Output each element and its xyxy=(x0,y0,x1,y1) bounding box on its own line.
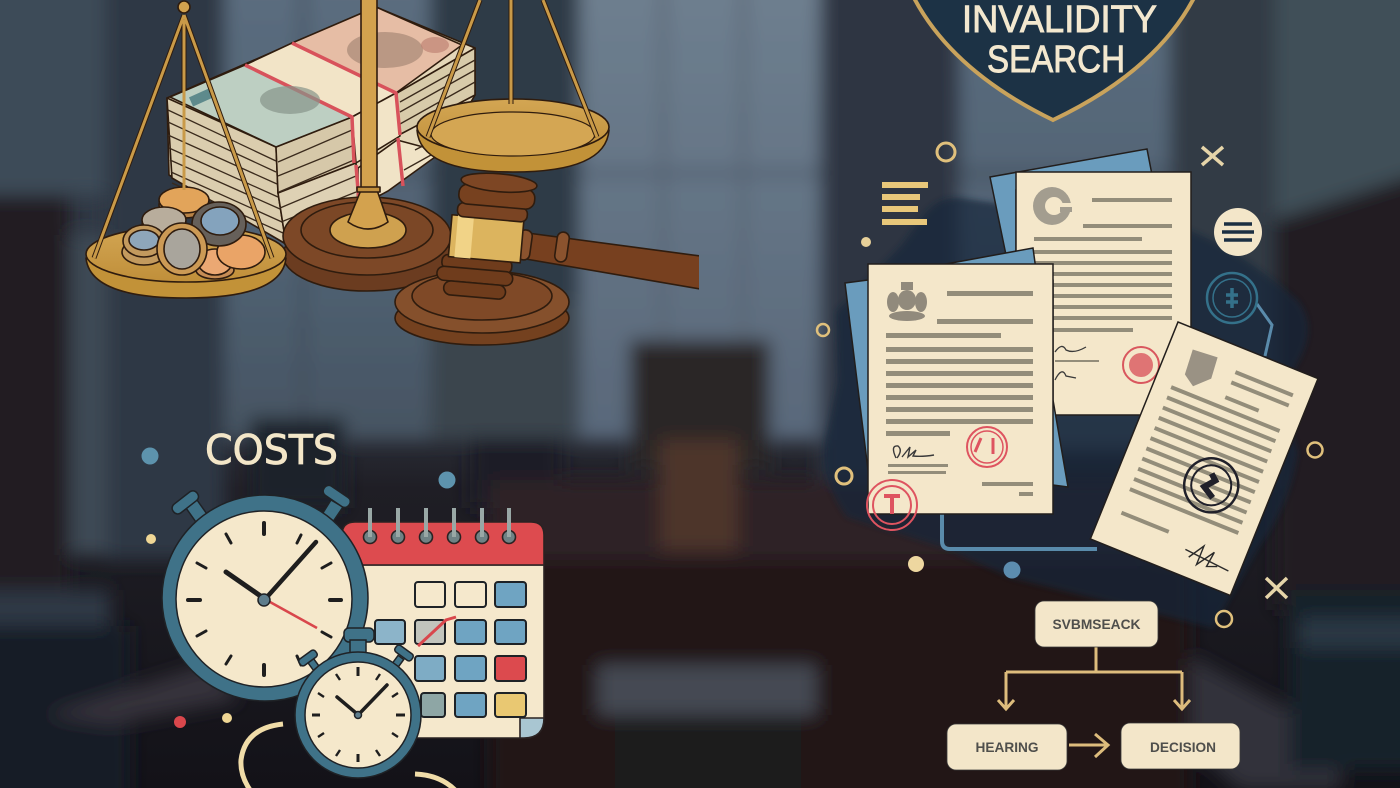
icon: large stopwatch xyxy=(162,483,368,701)
icon: calendar xyxy=(342,508,544,738)
decorative arcs xyxy=(241,724,455,788)
icon: left rear string xyxy=(182,20,186,190)
shield: invalidity search xyxy=(912,0,1196,120)
black stamp xyxy=(1176,450,1246,520)
calendar binder rings xyxy=(364,508,516,544)
connector lines xyxy=(942,304,1272,549)
page text lines xyxy=(1034,198,1172,362)
illustration: scales, money and gavel xyxy=(86,0,700,345)
calendar day cells xyxy=(375,582,526,717)
heading: costs: COSTS xyxy=(205,426,338,474)
crest xyxy=(887,282,927,321)
shield title line 1: INVALIDITY xyxy=(962,0,1157,41)
icon: gavel block xyxy=(395,271,569,345)
red stamp xyxy=(1123,347,1159,383)
icon: small stopwatch xyxy=(295,628,421,778)
document: top page xyxy=(990,149,1191,415)
flowchart xyxy=(947,601,1240,770)
logo xyxy=(1033,187,1072,225)
icon: right scale pan xyxy=(417,0,609,172)
icon: cream menu badge xyxy=(1214,208,1262,256)
document: front page xyxy=(845,248,1068,530)
page text lines xyxy=(886,291,1033,496)
icon: teal seal xyxy=(1207,273,1257,323)
shield title line 2: SEARCH xyxy=(987,39,1125,81)
flow box: submit search xyxy=(1035,601,1158,647)
icon: left scale pan with coins xyxy=(86,1,286,298)
red stamps xyxy=(867,427,1007,530)
flow box: hearing xyxy=(947,724,1067,770)
flow box: decision xyxy=(1121,723,1240,769)
icon: wooden scale base xyxy=(283,197,451,291)
flow box: submit search: SVBMSEACK xyxy=(1052,616,1140,632)
icon: stack of banknotes xyxy=(167,7,475,244)
icon: gavel xyxy=(435,169,700,302)
decorative dots: costs xyxy=(142,448,456,728)
icon: scale pole xyxy=(330,0,406,248)
flow box: hearing: HEARING xyxy=(976,739,1039,755)
decorative marks: documents xyxy=(817,143,1322,627)
document: tilted page xyxy=(1090,322,1318,596)
flow box: decision: DECISION xyxy=(1150,739,1216,755)
page text lines xyxy=(1120,350,1295,558)
flowchart arrows xyxy=(998,647,1190,757)
dark backdrop behind documents xyxy=(824,198,1308,628)
